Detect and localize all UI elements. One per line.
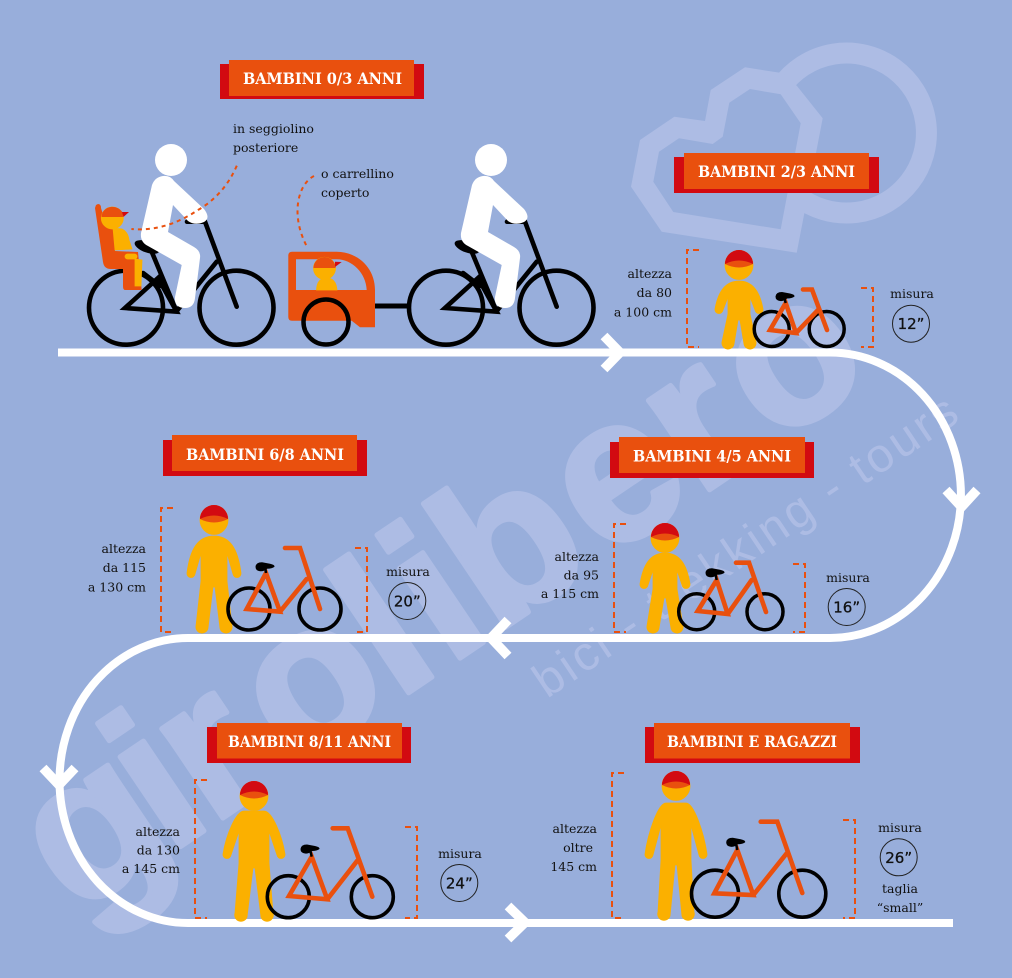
height label: altezza [136, 824, 181, 839]
ribbon heading 8/11: BAMBINI 8/11 ANNI [228, 732, 391, 751]
ribbon heading 6/8: BAMBINI 6/8 ANNI [186, 445, 344, 464]
watermark: heart of logo [631, 67, 823, 253]
child figure [645, 771, 707, 920]
child figure [223, 781, 285, 921]
size badge 16: 16” [833, 598, 860, 616]
height label: 145 cm [550, 859, 597, 874]
right bracket [843, 820, 855, 918]
label: seggiolino: in seggiolino [233, 121, 314, 136]
left bracket [614, 524, 626, 632]
height label: altezza [554, 549, 600, 564]
arrow: left, middle road [491, 620, 508, 656]
label: carrellino [321, 166, 394, 200]
bicycle towing trailer [409, 222, 594, 345]
height label: da 95 [564, 568, 599, 582]
size badge 20: 20” [394, 592, 421, 610]
ribbon heading 6/8 [163, 435, 367, 476]
rear child seat with child [95, 204, 142, 290]
ribbon heading 2/3: BAMBINI 2/3 ANNI [698, 162, 855, 181]
label misura: misura [878, 820, 922, 835]
arrow: right, top road [604, 336, 620, 369]
winding white road [58, 352, 961, 923]
height label: da 80 [637, 285, 672, 300]
road path [43, 336, 977, 939]
ribbon heading ragazzi: BAMBINI E RAGAZZI [667, 732, 837, 751]
dotted leader to trailer [298, 176, 314, 247]
panel: bambini 8/11 anni [122, 723, 482, 921]
ribbon heading 4/5 [610, 437, 814, 478]
label: carrellino: coperto [321, 185, 369, 200]
ribbon heading 8/11 [207, 723, 411, 763]
bike 26 inch [692, 822, 826, 917]
right bracket [405, 827, 417, 918]
dotted leader to rear seat [131, 166, 237, 229]
label misura: misura [826, 570, 870, 585]
size badge 12: 12” [898, 315, 924, 333]
size badge 26: 26” [885, 849, 912, 867]
panel: bambini 0/3 anni [89, 60, 594, 345]
arrow: down, left bend [43, 768, 75, 785]
watermark: circle of logo [781, 53, 926, 213]
bike 24 inch [267, 828, 393, 918]
label misura: misura [386, 564, 430, 579]
height label: a 130 cm [88, 580, 146, 594]
ribbon heading 2/3 [674, 153, 879, 193]
ribbon heading 0/3: BAMBINI 0/3 ANNI [243, 69, 402, 88]
covered trailer with child [288, 252, 375, 344]
bike 12 inch [754, 290, 844, 346]
child figure [715, 250, 763, 349]
height label: da 115 [103, 560, 146, 575]
left bracket [161, 508, 173, 632]
label misura: misura [890, 286, 934, 301]
watermark: tagline: bici - trekking - tours [524, 385, 968, 708]
left bracket [612, 773, 624, 918]
size badge 24 [441, 864, 478, 902]
height label: a 100 cm [614, 304, 672, 320]
height label: a 145 cm [122, 861, 180, 876]
size badge 12 [892, 305, 930, 342]
size badge 20 [389, 582, 426, 620]
arrow: down, right bend [946, 490, 977, 507]
child figure [187, 505, 241, 633]
left bracket [195, 780, 207, 918]
height label: altezza [102, 541, 147, 556]
size badge 26 [880, 839, 917, 876]
panel: bambini 2/3 anni [614, 153, 934, 349]
panel: bambini e ragazzi [550, 723, 923, 920]
bike 20 inch [228, 548, 341, 630]
label misura: misura [438, 846, 482, 861]
right bracket [355, 548, 367, 632]
height label [122, 824, 181, 876]
ribbon heading ragazzi [645, 723, 860, 763]
label taglia small [877, 881, 923, 915]
bike 16 inch [679, 563, 783, 630]
label taglia small: “small” [877, 900, 923, 915]
right bracket [793, 564, 805, 632]
tow bar [374, 304, 408, 308]
label: seggiolino: posteriore [233, 140, 298, 155]
height label [614, 266, 673, 320]
label: seggiolino [233, 121, 314, 155]
height label [88, 541, 147, 594]
height label: a 115 cm [541, 586, 599, 601]
watermark: brand name: girolibero [0, 223, 902, 954]
height label: oltre [563, 840, 593, 855]
size badge 16 [828, 588, 865, 626]
label: carrellino: o carrellino [321, 166, 394, 181]
height label [550, 821, 598, 874]
panel: bambini 6/8 anni [88, 435, 430, 633]
right bracket [861, 288, 873, 347]
height label: altezza [628, 266, 673, 281]
panel: bambini 4/5 anni [541, 437, 870, 633]
ribbon heading 0/3 [220, 60, 424, 99]
ribbon heading 4/5: BAMBINI 4/5 ANNI [633, 446, 791, 466]
bicycle with rear seat [89, 222, 274, 345]
size badge 24: 24” [446, 874, 473, 892]
cyclist 1 [141, 144, 208, 308]
height label: altezza [552, 821, 598, 836]
left bracket [687, 250, 699, 347]
arrow: right, bottom road [508, 906, 525, 939]
height label: da 130 [137, 842, 180, 858]
label taglia small: taglia [882, 881, 919, 896]
child figure [640, 523, 690, 633]
cyclist 2 [461, 144, 528, 308]
height label [541, 549, 600, 601]
